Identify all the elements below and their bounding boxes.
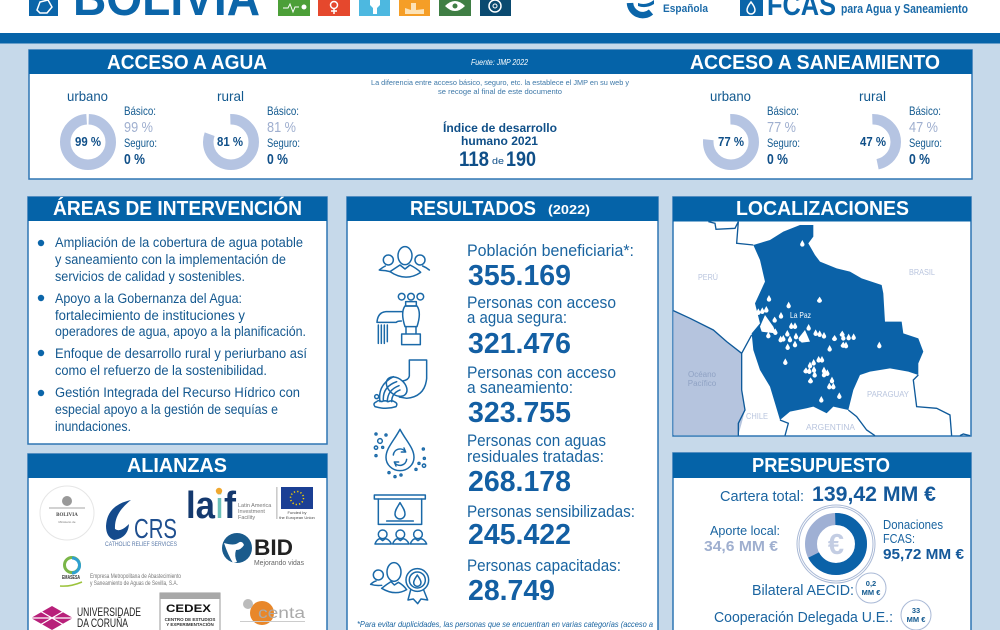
logo: Cooperación Española — [630, 0, 709, 15]
result: capacitadas — [467, 556, 621, 607]
bullet list: inundaciones. — [55, 419, 131, 434]
sanitation rural block — [850, 88, 942, 168]
heading: ÁREAS DE INTERVENCIÓN — [53, 196, 302, 220]
bullet list: fortalecimiento de instituciones y — [55, 308, 245, 323]
map labels: La Paz — [790, 310, 811, 320]
logo: EU flag — [279, 487, 315, 520]
icon: pipe — [374, 360, 427, 408]
icon: trained people with medal — [371, 563, 429, 604]
heading: LOCALIZACIONES — [736, 198, 909, 220]
icon: water treatment — [374, 429, 426, 478]
bilateral AECID: Bilateral AECID: — [752, 583, 854, 599]
donaciones FCAS: 95,72 MM € — [883, 546, 965, 563]
heading: (2022) — [548, 203, 590, 217]
map of Bolivia — [673, 222, 970, 436]
result: agua segura — [467, 293, 616, 360]
result: saneamiento: Personas con acceso — [467, 363, 616, 382]
result: agua segura: Personas con acceso — [467, 293, 616, 312]
result: aguas residuales: 268.178 — [468, 466, 571, 498]
sanitation rural block: 0 % — [909, 151, 930, 168]
logo: LAIF: la — [186, 485, 216, 527]
water rural block: rural — [217, 88, 244, 104]
logo: Bolivia ministry — [40, 486, 94, 540]
bilateral AECID: 0,2 — [866, 579, 876, 588]
logo: LAIF: f — [224, 485, 236, 527]
logo: FCAS — [740, 0, 968, 22]
result: aguas residuales: residuales tratadas: — [467, 447, 604, 466]
result: saneamiento: a saneamiento: — [467, 378, 573, 397]
logo: CEDEX — [160, 593, 220, 630]
logo: Emasesa: EMASESA — [62, 575, 80, 581]
human development index — [443, 122, 557, 171]
water rural block: 81 % — [267, 119, 296, 136]
bullet list: especial apoyo a la gestión de sequías e — [55, 402, 278, 417]
sanitation urban block: 77 % — [718, 135, 744, 149]
note — [371, 78, 629, 96]
panel: áreas de intervención — [28, 196, 327, 444]
cooperación delegada — [714, 600, 931, 630]
human development index: 118 — [459, 148, 489, 171]
header: title and logos — [29, 0, 968, 26]
result: sensibilizadas: Personas sensibilizadas: — [467, 502, 635, 521]
logo: CEDEX: CEDEX — [166, 603, 212, 615]
water urban block: Básico: — [124, 104, 156, 118]
bullet list: Apoyo a la Gobernanza del Agua: — [55, 291, 242, 306]
logo: Emasesa: Empresa Metropolitana de Abastecimiento — [90, 574, 182, 580]
logo: BID: Mejorando vidas — [254, 560, 304, 567]
heading: PRESUPUESTO — [752, 455, 890, 477]
sanitation rural block: Seguro: — [909, 136, 942, 150]
logo: LAIF: i — [216, 485, 223, 527]
bullet list: como el refuerzo de la sostenibilidad. — [55, 363, 267, 378]
aporte local — [704, 523, 780, 555]
result: sensibilizadas — [467, 502, 635, 551]
heading: ALIANZAS — [127, 455, 227, 477]
logo: LAIF: Facility — [238, 515, 255, 521]
water rural block: 81 % — [217, 135, 243, 149]
result: aguas residuales: Personas con aguas — [467, 431, 606, 450]
map labels: CHILE — [746, 412, 768, 421]
donaciones FCAS: Donaciones — [883, 518, 943, 532]
water urban block: 99 % — [124, 119, 153, 136]
map labels: Océano — [688, 370, 717, 379]
logo: Cooperación Española: Española — [663, 3, 709, 15]
logo: Universidade da Coruña: DA CORUÑA — [77, 616, 128, 630]
result: agua segura: 321.476 — [468, 328, 571, 360]
human development index: humano 2021 — [461, 136, 539, 148]
map labels: PARAGUAY — [867, 390, 910, 399]
sanitation urban block: urbano — [710, 88, 751, 104]
bullet list: y saneamiento con la implementación de — [55, 252, 286, 267]
result: población beneficiaria: Población beneficiaria*: — [467, 241, 634, 260]
bullet list: Enfoque de desarrollo rural y periurbano así — [55, 346, 307, 361]
icon: people — [379, 247, 429, 277]
note: se recoge al final de este documento — [438, 87, 562, 96]
total — [720, 483, 936, 506]
panel: resultados — [347, 197, 658, 630]
total: Cartera total: — [720, 489, 804, 505]
result: población beneficiaria: 355.169 — [468, 260, 571, 292]
logo: Emasesa: y Saneamiento de Aguas de Sevilla, S.A. — [90, 581, 178, 587]
icon: Bolivia map square — [29, 0, 58, 16]
bullet list — [38, 235, 307, 434]
sanitation urban block: 0 % — [767, 151, 788, 168]
heading: acceso a saneamiento: ACCESO A SANEAMIENTO — [690, 52, 940, 74]
panel: presupuesto — [673, 453, 971, 630]
logo: CEDEX: CENTRO DE ESTUDIOS — [165, 617, 215, 622]
icon: tap — [377, 293, 424, 345]
result: capacitadas: Personas capacitadas: — [467, 556, 621, 575]
budget donut — [797, 505, 875, 583]
sanitation rural block: 47 % — [909, 119, 938, 136]
logo: EU flag: Funded by — [288, 510, 306, 515]
result: sensibilizadas: 245.422 — [468, 519, 571, 551]
result: capacitadas: 28.749 — [468, 575, 555, 607]
logo: Bolivia ministry: Ministerio de — [58, 520, 76, 524]
logo: BID: BID — [254, 535, 293, 560]
bullet list: servicios de calidad y sostenibles. — [55, 269, 245, 284]
heading: RESULTADOS — [410, 198, 536, 220]
note: La diferencia entre acceso básico, seguro, etc. la establece el JMP en su web y — [371, 78, 629, 87]
bilateral AECID: MM € — [862, 588, 881, 597]
logo: Emasesa — [60, 558, 182, 587]
logo: LAIF — [186, 485, 277, 527]
source: Fuente: JMP 2022 — [471, 58, 528, 67]
logo: Centa — [240, 599, 305, 625]
heading: acceso a agua: ACCESO A AGUA — [107, 52, 267, 74]
total: 139,42 MM € — [812, 483, 936, 506]
result: saneamiento — [467, 363, 616, 429]
sanitation rural block: Básico: — [909, 104, 941, 118]
cooperación delegada: Cooperación Delegada U.E.: — [714, 610, 893, 626]
sanitation urban block: Básico: — [767, 104, 799, 118]
panel: acceso a agua y saneamiento — [29, 50, 972, 179]
water rural block: Seguro: — [267, 136, 300, 150]
sanitation rural block: 47 % — [860, 135, 886, 149]
bilateral AECID — [752, 573, 886, 603]
donaciones FCAS — [883, 518, 965, 563]
logo: Bolivia ministry: BOLIVIA — [56, 513, 78, 518]
SDG icons row — [278, 0, 511, 16]
sanitation rural block: rural — [859, 88, 886, 104]
map labels: PERÚ — [698, 273, 718, 282]
bullet list: Ampliación de la cobertura de agua potable — [55, 235, 303, 250]
result: población beneficiaria — [467, 241, 634, 292]
water urban block: 0 % — [124, 151, 145, 168]
water urban block: urbano — [67, 88, 108, 104]
map labels: ARGENTINA — [806, 423, 856, 432]
logo: CEDEX: Y EXPERIMENTACIÓN — [166, 620, 214, 627]
panel: localizaciones — [673, 197, 971, 436]
water rural block: 0 % — [267, 151, 288, 168]
water urban block: 99 % — [75, 135, 101, 149]
map labels: BRASIL — [909, 268, 935, 277]
water urban block: Seguro: — [124, 136, 157, 150]
cooperación delegada: 33 — [912, 606, 920, 615]
logo: FCAS: para Agua y Saneamiento — [841, 2, 968, 16]
human development index: 190 — [506, 148, 536, 171]
sanitation urban block: 77 % — [767, 119, 796, 136]
map labels — [688, 268, 935, 432]
logo: Universidade da Coruña — [31, 605, 141, 630]
logo: CRS: CRS — [134, 513, 177, 544]
sanitation urban block — [708, 88, 800, 168]
aporte local: Aporte local: — [710, 523, 780, 538]
panel: alianzas — [28, 454, 327, 630]
budget donut: € — [828, 529, 844, 561]
donaciones FCAS: FCAS: — [883, 532, 915, 546]
logo: EU flag: the European Union — [279, 515, 315, 520]
bullet list: Gestión Integrada del Recurso Hídrico con — [55, 385, 300, 400]
logo: Universidade da Coruña: UNIVERSIDADE — [77, 605, 141, 619]
water rural block: Básico: — [267, 104, 299, 118]
human development index: Índice de desarrollo — [443, 122, 557, 135]
water rural block — [208, 88, 300, 168]
footnote: *Para evitar duplicidades, las personas que se encuentran en varias categorías (acceso a — [357, 619, 653, 629]
cooperación delegada: MM € — [907, 615, 926, 624]
logo: LAIF: Investment — [238, 509, 265, 515]
icon: training screen — [374, 495, 427, 544]
human development index: de — [492, 156, 504, 166]
logo: Centa: centa — [258, 605, 305, 622]
water urban block — [65, 88, 157, 168]
result: aguas residuales — [467, 431, 606, 498]
result: agua segura: a agua segura: — [467, 308, 567, 327]
sanitation urban block: Seguro: — [767, 136, 800, 150]
map labels: Pacífico — [688, 379, 717, 388]
logo: BID — [222, 533, 304, 567]
aporte local: 34,6 MM € — [704, 539, 778, 555]
result: saneamiento: 323.755 — [468, 397, 571, 429]
logo: CRS — [105, 500, 177, 548]
bullet list: operadores de agua, apoyo a la planificación. — [55, 324, 306, 339]
logo: LAIF: Latin America — [238, 503, 272, 509]
logo: CRS: CATHOLIC RELIEF SERVICES — [105, 542, 177, 548]
